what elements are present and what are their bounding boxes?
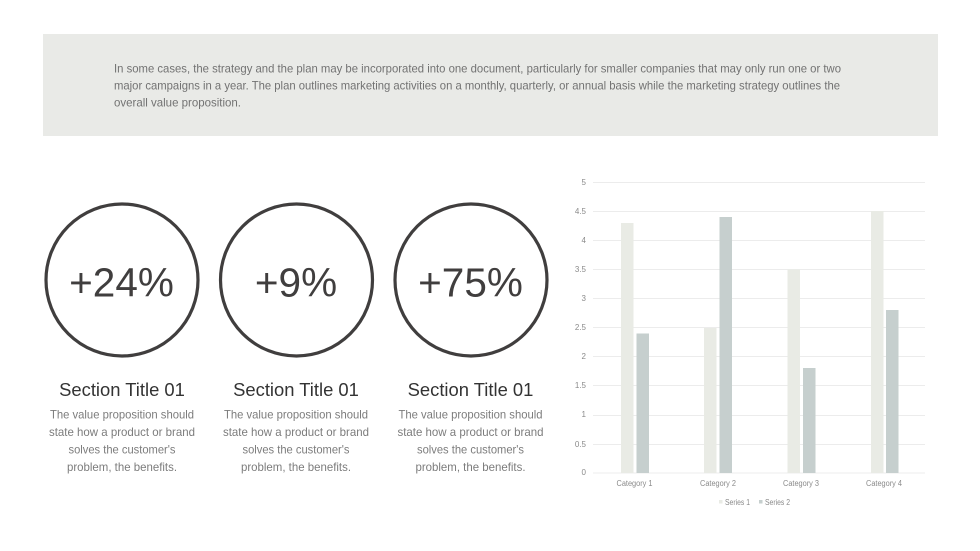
legend: Series 1 — [725, 498, 750, 507]
intro paragraph: overall value proposition. — [114, 96, 241, 110]
y axis labels: 4 — [582, 236, 587, 245]
description — [223, 408, 369, 474]
legend: Series 2 — [765, 498, 790, 507]
y axis labels: 5 — [582, 178, 587, 187]
panel: stat 2 — [220, 204, 372, 474]
series 1 bars — [621, 211, 884, 473]
circle stat: +24%: +24% — [69, 260, 174, 306]
y axis labels: 3.5 — [575, 265, 587, 274]
category labels: Category 1 — [616, 479, 653, 488]
category labels — [616, 479, 902, 488]
y axis labels: 4.5 — [575, 207, 587, 216]
category labels: Category 3 — [783, 479, 819, 488]
panel: stat 3 — [395, 204, 547, 474]
category labels: Category 2 — [700, 479, 736, 488]
category labels: Category 4 — [866, 479, 902, 488]
series 2 bars — [636, 217, 898, 473]
y axis labels: 1 — [582, 410, 587, 419]
description: The value proposition should — [224, 408, 368, 422]
circle stat: +75% — [395, 204, 547, 356]
legend — [719, 498, 790, 507]
panel: stat 1 — [46, 204, 198, 474]
intro paragraph: In some cases, the strategy and the plan may be incorporated into one document, particularly for smaller companies that may only run one or two — [114, 62, 841, 76]
description: The value proposition should — [50, 408, 194, 422]
description: problem, the benefits. — [416, 460, 526, 474]
circle stat: +75%: +75% — [418, 260, 523, 306]
description: solves the customer's — [417, 442, 524, 456]
y axis labels: 0.5 — [575, 440, 587, 449]
description: state how a product or brand — [223, 425, 369, 439]
description: solves the customer's — [68, 442, 176, 456]
section title: Section Title 01 — [59, 379, 185, 400]
y axis labels: 2 — [582, 352, 587, 361]
description: solves the customer's — [242, 442, 350, 456]
circle stat: +9%: +9% — [255, 260, 337, 306]
circle stat: +24% — [46, 204, 198, 356]
description — [398, 408, 544, 474]
y axis labels: 3 — [582, 294, 587, 303]
y axis labels — [575, 178, 587, 477]
y axis labels: 2.5 — [575, 323, 587, 332]
description: state how a product or brand — [398, 425, 544, 439]
description: problem, the benefits. — [67, 460, 177, 474]
bar chart — [575, 178, 925, 507]
description: The value proposition should — [398, 408, 542, 422]
description — [49, 408, 195, 474]
circle stat: +9% — [220, 204, 372, 356]
intro paragraph: major campaigns in a year. The plan outlines marketing activities on a monthly, quarterly, or annual basis while the marketing strategy outlines the — [114, 78, 840, 92]
y axis labels: 0 — [582, 468, 587, 477]
description: state how a product or brand — [49, 425, 195, 439]
section title: Section Title 01 — [233, 379, 359, 400]
y axis labels: 1.5 — [575, 381, 587, 390]
section title: Section Title 01 — [408, 379, 533, 400]
panel: intro text — [43, 34, 938, 136]
intro paragraph — [114, 62, 841, 110]
description: problem, the benefits. — [241, 460, 351, 474]
